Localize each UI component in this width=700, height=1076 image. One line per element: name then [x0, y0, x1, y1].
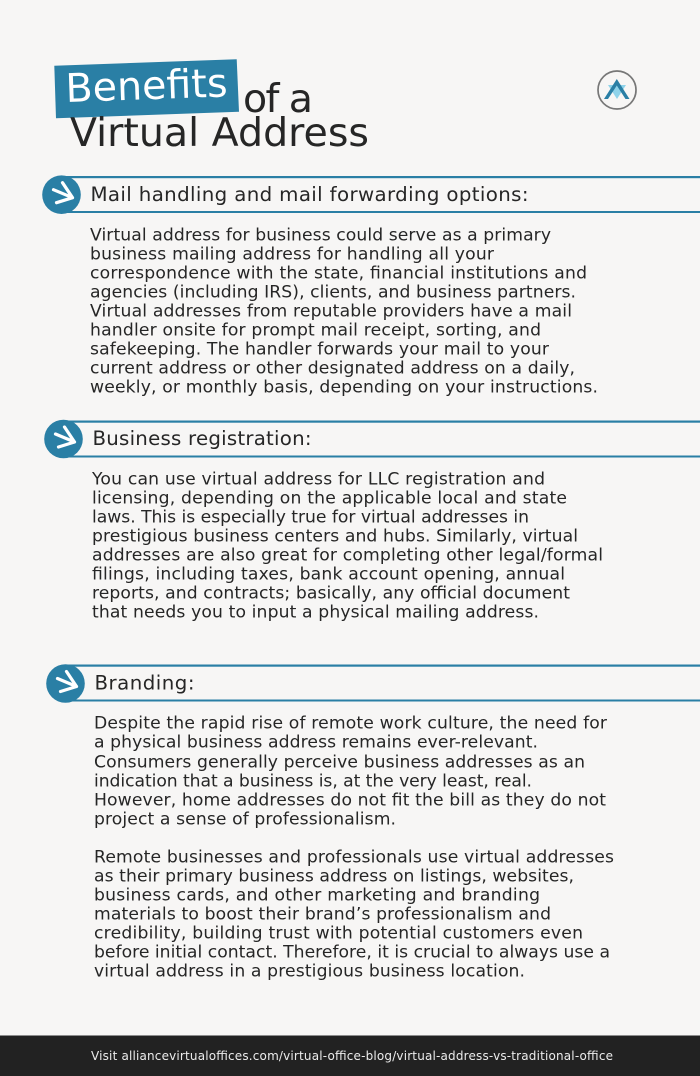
icon: arrow badge — [44, 420, 83, 458]
body text: that needs you to input a physical mailing address. — [92, 602, 539, 622]
body text: prestigious business centers and hubs. Similarly, virtual — [92, 526, 578, 546]
body text: current address or other designated address on a daily, — [90, 358, 575, 378]
section header: mail handling — [42, 175, 700, 214]
panel: mail handling — [42, 175, 700, 398]
footer bar — [0, 1036, 700, 1076]
body text: Virtual address for business could serve as a primary — [90, 226, 551, 246]
body text: filings, including taxes, bank account opening, annual — [92, 564, 565, 584]
body text: paragraph two: Remote businesses and professionals use virtual addresses — [94, 848, 614, 868]
body text: addresses are also great for completing other legal/formal — [92, 546, 603, 566]
body text: Virtual addresses from reputable providers have a mail — [90, 302, 572, 322]
title — [54, 59, 369, 156]
section heading: Branding: — [94, 672, 194, 694]
section heading: Mail handling and mail forwarding options: — [90, 183, 528, 206]
body text: business mailing address for handling all your — [90, 244, 495, 264]
title text: of a: of a — [243, 76, 313, 122]
body text: paragraph one: Despite the rapid rise of remote work culture, the need for — [94, 714, 608, 734]
body text: paragraph one: project a sense of professionalism. — [94, 810, 396, 830]
body text: laws. This is especially true for virtual addresses in — [92, 508, 529, 528]
body text — [90, 226, 598, 398]
section heading: Business registration: — [92, 427, 312, 450]
body text: paragraph two: business cards, and other marketing and branding — [94, 886, 540, 906]
body text: handler onsite for prompt mail receipt, sorting, and — [90, 320, 541, 340]
body text: safekeeping. The handler forwards your mail to your — [90, 340, 550, 360]
body text: paragraph two: materials to boost their brand’s professionalism and — [94, 904, 551, 924]
body text: paragraph two: before initial contact. Therefore, it is crucial to always use a — [94, 942, 610, 962]
body text: agencies (including IRS), clients, and business partners. — [90, 282, 576, 302]
body text: paragraph two: as their primary business address on listings, websites, — [94, 866, 574, 886]
body text: paragraph two — [94, 848, 614, 982]
body text: You can use virtual address for LLC registration and — [91, 470, 545, 490]
body text: paragraph two: virtual address in a prestigious business location. — [94, 962, 525, 982]
body text: licensing, depending on the applicable local and state — [92, 488, 567, 508]
body text: paragraph two: credibility, building trust with potential customers even — [94, 924, 583, 944]
title text: Virtual Address: Virtual Address — [70, 110, 369, 156]
title highlight: Benefits: Benefits — [65, 60, 228, 112]
panel: business registration — [44, 420, 700, 622]
icon: company logo — [598, 71, 636, 109]
section header: branding — [46, 664, 700, 703]
body text: weekly, or monthly basis, depending on your instructions. — [90, 378, 598, 398]
body text: paragraph one: However, home addresses do not fit the bill as they do not — [94, 790, 606, 810]
icon: arrow badge — [46, 664, 85, 703]
body text — [91, 470, 603, 622]
panel: branding — [46, 664, 700, 982]
footer link text: Visit alliancevirtualoffices.com/virtual-office-blog/virtual-address-vs-traditional-office — [91, 1049, 613, 1063]
body text: paragraph one: Consumers generally perceive business addresses as an — [94, 752, 585, 772]
body text: paragraph one — [94, 714, 608, 830]
body text: paragraph one: a physical business address remains ever-relevant. — [94, 732, 538, 752]
section header: business registration — [44, 420, 700, 458]
icon: arrow badge — [42, 175, 81, 214]
body text: reports, and contracts; basically, any official document — [92, 584, 570, 604]
body text: paragraph one: indication that a business is, at the very least, real. — [94, 772, 532, 792]
body text: correspondence with the state, financial institutions and — [90, 264, 587, 284]
